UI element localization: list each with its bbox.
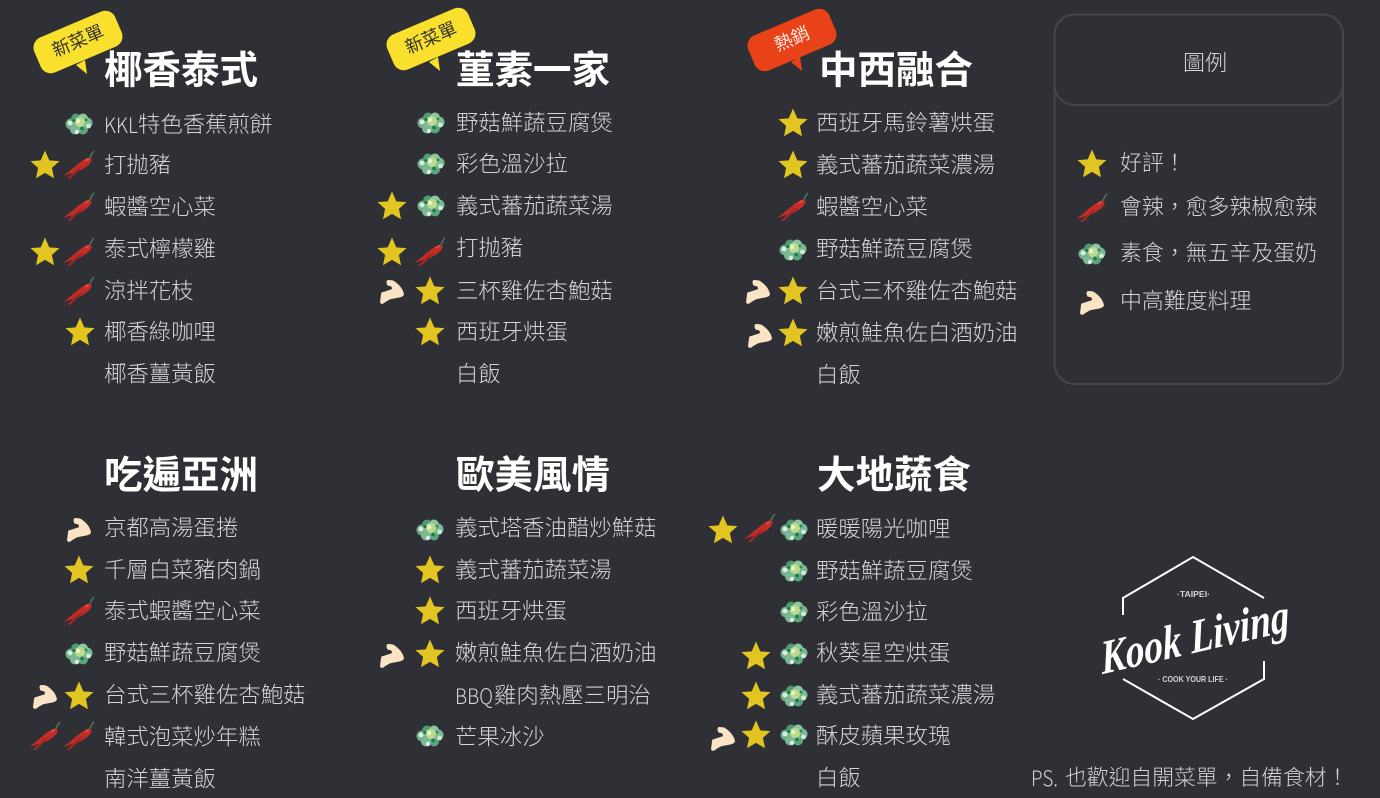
callout: 熱銷 xyxy=(744,5,840,75)
legend: good reviews: 好評！ xyxy=(1120,150,1186,176)
item xyxy=(66,108,272,140)
item: 義式蕃茄蔬菜濃湯 xyxy=(816,152,995,178)
legend frame xyxy=(1054,14,1343,384)
item xyxy=(742,682,995,709)
legend header box xyxy=(1054,14,1343,105)
item xyxy=(746,276,1018,304)
heading: 菫素一家 xyxy=(456,50,610,92)
item xyxy=(711,720,950,751)
item: 打抛豬 xyxy=(456,236,523,260)
logo hexagon top xyxy=(1123,557,1264,615)
item: 彩色溫沙拉 xyxy=(816,600,928,624)
item: 彩色溫沙拉 xyxy=(456,152,568,176)
callout: 新菜單 xyxy=(383,4,479,74)
item: 椰香薑黃飯 xyxy=(104,362,216,386)
item xyxy=(742,640,950,669)
footnote: PS. xyxy=(1031,762,1058,792)
panel: 歐美風情 xyxy=(380,454,657,750)
item: 野菇鮮蔬豆腐煲 xyxy=(104,640,261,666)
item: 千層白菜豬肉鍋 xyxy=(104,558,261,582)
item: 西班牙馬鈴薯烘蛋 xyxy=(816,110,995,136)
item: 白飯 xyxy=(816,766,861,790)
item: 野菇鮮蔬豆腐煲 xyxy=(816,558,973,584)
logo text: Taipei: ·TAIPEI· xyxy=(1177,589,1210,599)
heading: 中西融合 xyxy=(819,50,973,92)
logo: Kook Living xyxy=(1098,557,1291,719)
logo script: Kook Living xyxy=(1098,589,1291,685)
item: 涼拌花枝 xyxy=(104,278,194,304)
heading: 大地蔬食 xyxy=(817,454,971,498)
item: 西班牙烘蛋 xyxy=(456,320,568,344)
item xyxy=(777,193,928,221)
item: 西班牙烘蛋 xyxy=(455,598,567,624)
panel: legend xyxy=(1054,14,1343,384)
heading: 吃遍亞洲 xyxy=(104,454,258,498)
item: 三杯雞佐杏鮑菇 xyxy=(456,278,613,304)
panel: 椰香泰式 xyxy=(30,7,272,387)
item: 泰式蝦醬空心菜 xyxy=(104,598,261,624)
item: 蝦醬空心菜 xyxy=(104,194,216,220)
item: 蝦醬空心菜 xyxy=(816,194,928,220)
item xyxy=(416,318,568,345)
item xyxy=(30,236,216,266)
item: 韓式泡菜炒年糕 xyxy=(104,724,261,750)
item xyxy=(63,277,194,305)
item xyxy=(63,193,216,221)
item: 台式三杯雞佐杏鮑菇 xyxy=(104,682,306,708)
callout: 新菜單 xyxy=(30,7,126,77)
panel: 大地蔬食 xyxy=(708,454,995,790)
legend: spicy: 會辣，愈多辣椒愈辣 xyxy=(1120,194,1317,220)
item xyxy=(416,724,545,750)
item: 秋葵星空烘蛋 xyxy=(816,640,950,666)
heading: 歐美風情 xyxy=(456,454,610,498)
item xyxy=(380,276,613,304)
item xyxy=(30,150,171,179)
legend: vegetarian: 素食，無五辛及蛋奶 xyxy=(1120,240,1317,266)
item: KKL xyxy=(104,108,138,140)
item xyxy=(66,318,216,345)
item: 芒果冰沙 xyxy=(455,724,545,750)
item: 白飯 xyxy=(456,362,501,386)
panel: 中西融合 xyxy=(744,5,1018,388)
item: BBQ xyxy=(455,680,493,710)
item: 嫩煎鮭魚佐白酒奶油 xyxy=(816,320,1018,346)
legend title: 圖例 xyxy=(1183,50,1227,76)
legend: good reviews xyxy=(1078,150,1186,177)
item: 義式蕃茄蔬菜濃湯 xyxy=(816,682,995,708)
item: 義式蕃茄蔬菜湯 xyxy=(456,194,613,218)
item: 白飯 xyxy=(816,362,861,388)
item xyxy=(33,682,306,709)
item xyxy=(416,596,567,624)
heading: 椰香泰式 xyxy=(104,50,258,92)
item: 椰香綠咖哩 xyxy=(104,320,216,344)
item: 打抛豬 xyxy=(104,152,171,178)
item xyxy=(380,640,657,668)
item xyxy=(378,236,523,266)
item xyxy=(708,514,950,543)
item xyxy=(748,318,1018,348)
callout: 新菜單: 新菜單 xyxy=(49,21,107,61)
callout: 新菜單: 新菜單 xyxy=(402,18,460,58)
callout: 熱銷: 熱銷 xyxy=(772,23,812,55)
footnote: 也歡迎自開菜單，自備食材！ xyxy=(1065,764,1348,790)
item: 義式蕃茄蔬菜湯 xyxy=(455,558,612,582)
item: 酥皮蘋果玫瑰 xyxy=(816,724,950,748)
logo tagline: · COOK YOUR LIFE · xyxy=(1158,674,1228,684)
item: 野菇鮮蔬豆腐煲 xyxy=(456,110,613,136)
legend: difficulty: 中高難度料理 xyxy=(1120,288,1251,314)
item: 台式三杯雞佐杏鮑菇 xyxy=(816,278,1018,304)
item: 嫩煎鮭魚佐白酒奶油 xyxy=(455,640,657,666)
item: 雞肉熱壓三明治 xyxy=(494,682,651,708)
item: 義式塔香油醋炒鮮菇 xyxy=(455,516,657,540)
item: 泰式檸檬雞 xyxy=(104,236,216,262)
item xyxy=(29,722,261,750)
logo hexagon bottom xyxy=(1123,661,1264,719)
panel: 吃遍亞洲 xyxy=(29,454,306,792)
item: 特色香蕉煎餅 xyxy=(138,112,272,136)
panel: 蔬素一家 xyxy=(378,4,613,387)
item: 南洋薑黃飯 xyxy=(104,766,216,792)
item xyxy=(378,192,613,219)
item: 野菇鮮蔬豆腐煲 xyxy=(816,236,973,262)
item: 京都高湯蛋捲 xyxy=(104,516,238,540)
item: 暖暖陽光咖哩 xyxy=(816,516,950,542)
